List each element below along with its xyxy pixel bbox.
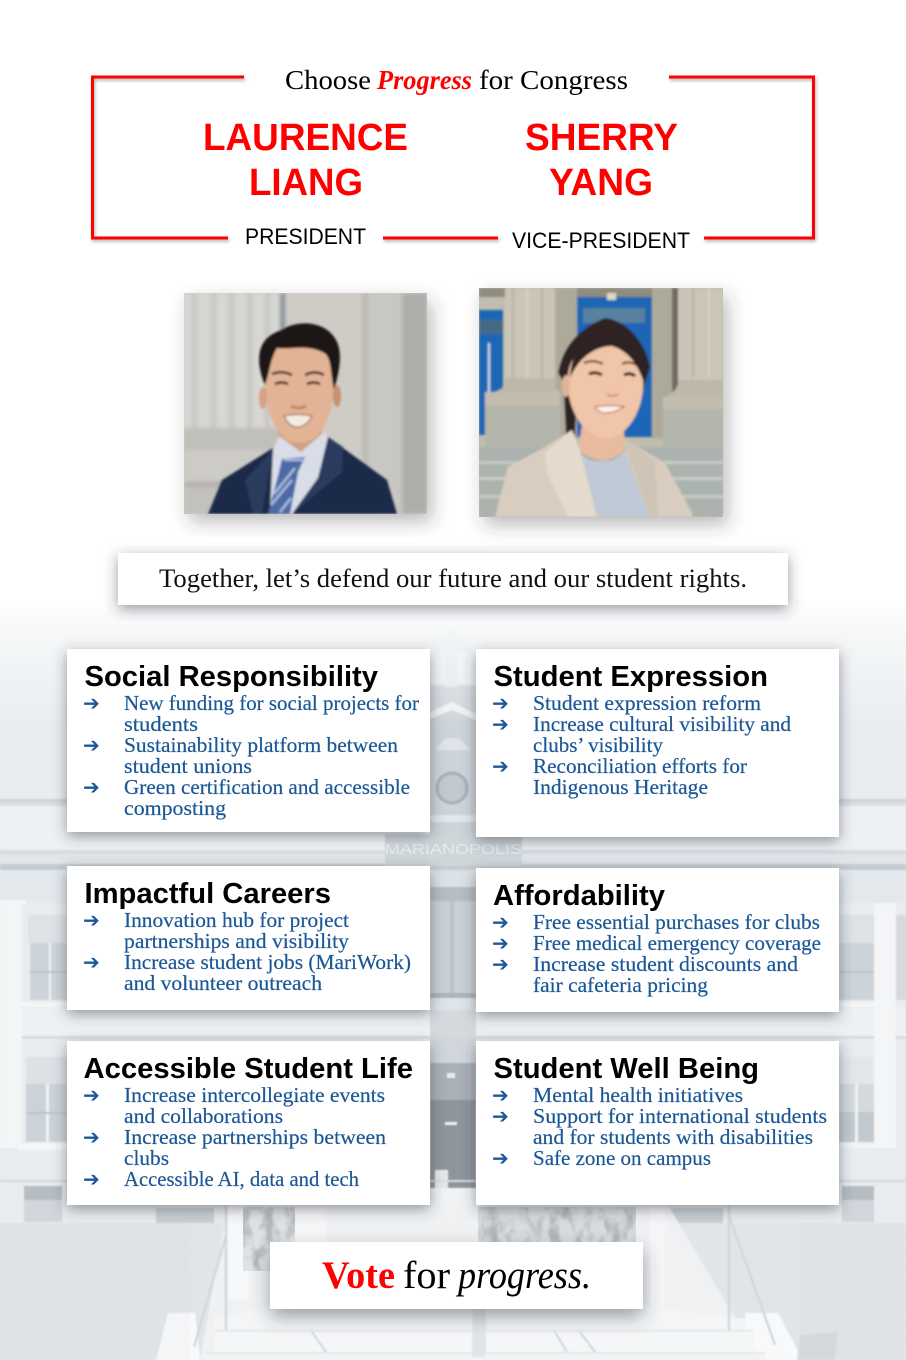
panel: Accessible Student Life: Accessible AI, data and tech: [124, 1167, 359, 1191]
panel: Social Responsibility: ➔: [83, 775, 100, 799]
candidate name: Laurence Liang: LAURENCE: [203, 117, 408, 159]
panel: Student Well Being: ➔: [492, 1083, 509, 1107]
panel: Social Responsibility: student unions: [124, 754, 252, 778]
role label: vice-president: VICE-PRESIDENT: [512, 228, 690, 253]
tower: [430, 685, 476, 835]
right windows: [839, 915, 875, 943]
photo: Sherry Yang: [479, 288, 723, 517]
panel: Student Well Being: Student Well Being: [494, 1053, 759, 1085]
panel: Affordability: fair cafeteria pricing: [533, 973, 709, 997]
upper facade and cornices: [0, 799, 906, 802]
panel: Accessible Student Life: [67, 1041, 430, 1205]
building sign: MARIANOPOLIS: [385, 841, 522, 858]
panel: Affordability: Free medical emergency coverage: [533, 931, 821, 955]
neck: [277, 430, 323, 452]
panel: Accessible Student Life: ➔: [83, 1083, 100, 1107]
panel: Accessible Student Life: clubs: [124, 1146, 169, 1170]
tagline banner: Together, let’s defend our future and our student rights.: [159, 564, 747, 593]
panel: Social Responsibility: [67, 649, 430, 832]
panel: Impactful Careers: ➔: [83, 950, 100, 974]
panel: Social Responsibility: Social Responsibility: [84, 661, 378, 693]
eyes and brows: [272, 372, 324, 375]
panel: Student Expression: Student Expression: [494, 661, 768, 693]
panel: Accessible Student Life: ➔: [83, 1167, 100, 1191]
shrubs: [243, 1207, 636, 1271]
panel: Affordability: Affordability: [493, 880, 665, 912]
lawn texture: [0, 1223, 906, 1360]
hair back: [558, 318, 650, 395]
title: Choose Progress for Congress: Choose: [285, 65, 371, 95]
panel: Student Well Being: ➔: [492, 1146, 509, 1170]
panel: Student Well Being: [476, 1041, 839, 1205]
blazer: [494, 429, 572, 517]
closing banner: Vote for progress: Vote: [322, 1254, 395, 1297]
tagline banner: [118, 553, 788, 605]
closing banner: Vote for progress: [270, 1242, 643, 1309]
left pilaster: [0, 903, 22, 1148]
collar and shirt: [270, 432, 329, 514]
panel: Accessible Student Life: and collaborations: [124, 1104, 283, 1128]
panel: Accessible Student Life: Accessible Student Life: [84, 1053, 413, 1085]
left windows: [28, 915, 67, 943]
ground: [0, 1223, 906, 1360]
panel: Impactful Careers: Increase student jobs (MariWork): [124, 950, 411, 974]
face: [568, 343, 643, 438]
panel: Student Expression: Indigenous Heritage: [533, 775, 708, 799]
panel: Student Well Being: Safe zone on campus: [533, 1146, 711, 1170]
central gap: [430, 870, 476, 887]
panel: Student Expression: Increase cultural visibility and: [533, 712, 791, 736]
title: Choose Progress for Congress: Progress: [376, 65, 472, 95]
panel: Affordability: ➔: [492, 931, 509, 955]
panel: Impactful Careers: [67, 866, 430, 1010]
panel: Social Responsibility: composting: [124, 796, 227, 820]
background: faded college building: [0, 598, 906, 1360]
panel: Student Expression: ➔: [492, 712, 509, 736]
nose and smile: [291, 406, 306, 408]
lapels: [298, 437, 344, 509]
candidate name: Laurence Liang: LIANG: [249, 162, 363, 204]
panel: Affordability: ➔: [492, 910, 509, 934]
nose and smile: [607, 394, 618, 396]
candidate name: Sherry Yang: SHERRY: [525, 117, 678, 159]
panel: Social Responsibility: ➔: [83, 733, 100, 757]
panel: Student Expression: ➔: [492, 691, 509, 715]
closing banner: Vote for progress: progress.: [455, 1254, 591, 1297]
panel: Student Well Being: ➔: [492, 1104, 509, 1128]
panel: Student Well Being: Support for international students: [533, 1104, 827, 1128]
panel: Student Well Being: Mental health initiatives: [533, 1083, 743, 1107]
panel: Affordability: Free essential purchases for clubs: [533, 910, 820, 934]
panel: Impactful Careers: partnerships and visibility: [124, 929, 350, 953]
tie: [268, 457, 305, 514]
face: [265, 339, 334, 443]
panel: Student Expression: Reconciliation efforts for: [533, 754, 747, 778]
panel: Accessible Student Life: Increase partnerships between: [124, 1125, 387, 1149]
panel: Impactful Careers: Impactful Careers: [84, 878, 331, 910]
panel: Social Responsibility: New funding for social projects for: [124, 691, 419, 715]
candidate name: Sherry Yang: YANG: [549, 162, 653, 204]
red campaign frame: [92, 77, 814, 238]
suit: [206, 447, 398, 514]
closing banner: Vote for progress: for: [403, 1254, 450, 1297]
candidate name: Laurence Liang: [203, 117, 408, 204]
lapels: [545, 430, 597, 517]
title: Choose Progress for Congress: [285, 65, 628, 95]
panel: Affordability: ➔: [492, 952, 509, 976]
panel: Impactful Careers: Innovation hub for project: [124, 908, 349, 932]
shirt: [577, 450, 650, 517]
photo: Laurence Liang: [184, 293, 427, 514]
neck: [578, 420, 624, 460]
eyes and brows: [584, 361, 638, 366]
candidate name: Sherry Yang: [525, 117, 678, 204]
panel: Impactful Careers: ➔: [83, 908, 100, 932]
panel: Social Responsibility: Sustainability platform between: [124, 733, 399, 757]
hair: [259, 323, 340, 390]
panel: Social Responsibility: students: [124, 712, 198, 736]
panel: Student Well Being: and for students with disabilities: [533, 1125, 813, 1149]
title: Choose Progress for Congress: for Congress: [479, 65, 628, 95]
fringe: [568, 341, 645, 380]
panel: Student Expression: ➔: [492, 754, 509, 778]
panel: Student Expression: [476, 649, 839, 837]
panel: Affordability: Increase student discounts and: [533, 952, 799, 976]
panel: Accessible Student Life: ➔: [83, 1125, 100, 1149]
rails: [194, 1205, 775, 1347]
panel: Student Expression: Student expression reform: [533, 691, 761, 715]
role label: president: PRESIDENT: [245, 224, 366, 249]
panel: Social Responsibility: Green certification and accessible: [124, 775, 410, 799]
panel: Social Responsibility: ➔: [83, 691, 100, 715]
panel: Accessible Student Life: Increase intercollegiate events: [124, 1083, 385, 1107]
panel: Impactful Careers: and volunteer outreach: [124, 971, 323, 995]
panel: Affordability: [476, 868, 839, 1012]
panel: Student Expression: clubs’ visibility: [533, 733, 663, 757]
stairs: [200, 1205, 760, 1360]
